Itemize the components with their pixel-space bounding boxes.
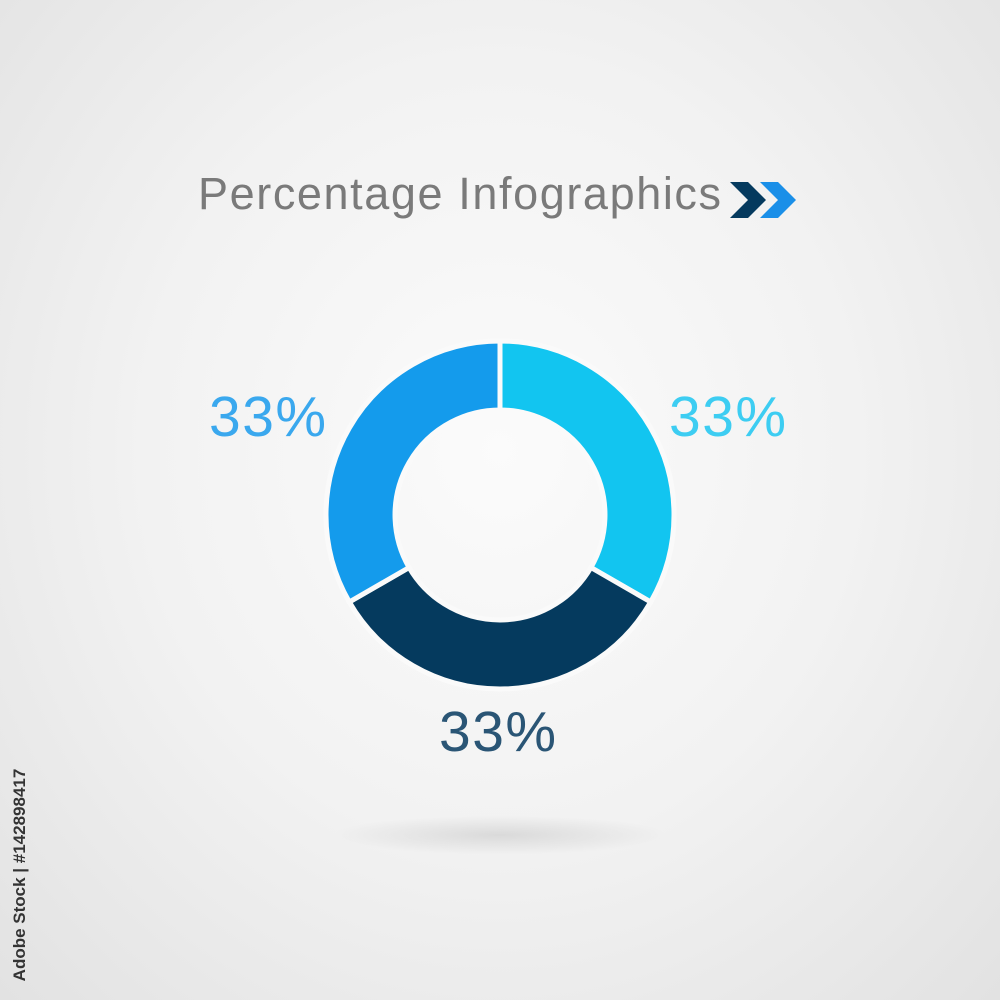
- segment: left 33%: [326, 341, 500, 602]
- label: right 33%: 33%: [669, 385, 788, 449]
- label: bottom 33%: 33%: [439, 700, 558, 764]
- segment: bottom 33%: [349, 568, 651, 689]
- icon: double chevron arrows: [730, 182, 796, 218]
- title: Percentage Infographics: [198, 168, 723, 219]
- segment: top-right 33%: [500, 341, 674, 602]
- shadow: [330, 815, 670, 855]
- label: left 33%: 33%: [209, 385, 328, 449]
- watermark side text: Adobe Stock | #142898417: [10, 769, 29, 981]
